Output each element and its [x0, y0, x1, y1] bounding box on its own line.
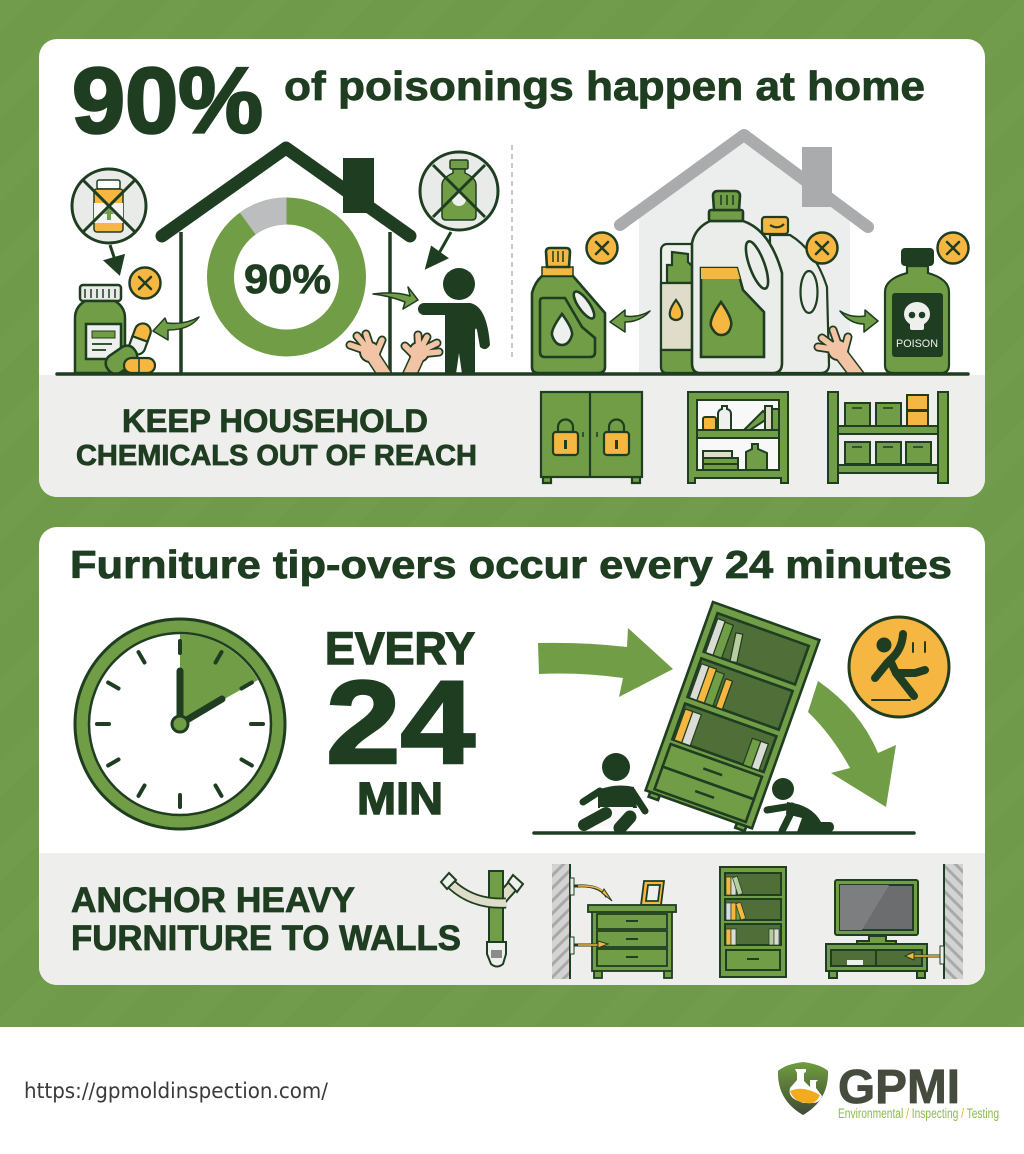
arrow: push	[538, 628, 673, 697]
arrow to medicine	[153, 317, 199, 340]
callout: keep chemicals out of reach: CHEMICALS OUT OF REACH	[76, 440, 477, 472]
icon: locked cabinet	[541, 392, 642, 483]
warning badges	[586, 232, 968, 264]
grey action strip	[39, 853, 985, 985]
warning badge	[130, 268, 160, 298]
logo shield	[778, 1062, 828, 1115]
poison bottle: POISON	[896, 338, 938, 350]
elapsed wedge	[180, 634, 258, 724]
grey action strip	[39, 375, 985, 497]
big stat 90%: 90%	[72, 48, 263, 152]
icon: medicine bottle and pills	[75, 285, 155, 377]
grey house	[620, 135, 868, 374]
stat: every 24 min: 24	[326, 657, 475, 789]
white jug with orange cap	[762, 217, 829, 373]
heading: Furniture tip-overs occur every 24 minutes	[70, 544, 952, 587]
icon: dresser anchored to wall	[552, 864, 676, 979]
reaching hands	[350, 334, 439, 378]
footer url: https://gpmoldinspection.com/	[24, 1079, 329, 1103]
icon: crossed chemical	[420, 152, 498, 230]
spray bottle	[661, 244, 701, 373]
capsule	[127, 321, 153, 357]
reaching hand	[818, 330, 860, 379]
stat: every 24 min	[325, 623, 475, 824]
stat: every 24 min: EVERY	[325, 623, 475, 674]
stat: every 24 min: MIN	[357, 773, 443, 824]
panel: poisonings	[39, 39, 985, 497]
icon: small bookcase	[720, 867, 786, 977]
crawling baby	[767, 778, 834, 832]
clock hands	[180, 671, 222, 724]
callout: keep chemicals out of reach	[76, 403, 477, 472]
arrow to poison bottle	[840, 310, 878, 332]
house roof	[162, 148, 410, 236]
green pill	[102, 342, 141, 377]
ground line	[534, 831, 914, 835]
icon: anchor strap	[441, 871, 523, 966]
small green jug	[532, 248, 605, 373]
donut chart	[220, 211, 352, 343]
icon: crossed medicine	[72, 169, 146, 243]
falling bookcase	[644, 602, 819, 833]
logo tagline: Environmental / Inspecting / Testing	[838, 1106, 999, 1121]
arrow down to child	[427, 232, 451, 267]
footer band	[0, 1027, 1024, 1154]
sitting baby	[583, 753, 645, 828]
callout: anchor furniture	[71, 881, 461, 958]
arrow down to medicine	[106, 245, 123, 273]
arrow to child	[373, 287, 418, 309]
logo: GPMI	[778, 1061, 999, 1121]
donut chart: 90%	[244, 256, 331, 302]
ground line	[57, 372, 968, 376]
large detergent jug	[692, 191, 782, 373]
poison bottle	[885, 248, 949, 373]
panel card	[39, 527, 985, 985]
arrow to small jug	[610, 310, 650, 332]
icon: storage rack	[828, 392, 948, 483]
panel card	[39, 39, 985, 497]
orange capsule	[124, 358, 155, 373]
skull	[904, 302, 930, 330]
callout: anchor furniture: FURNITURE TO WALLS	[71, 919, 461, 958]
child silhouette	[418, 268, 490, 374]
clock	[75, 619, 285, 829]
warning: falling person	[849, 617, 949, 717]
logo wordmark: GPMI	[838, 1061, 960, 1114]
arrow: falling	[808, 681, 896, 807]
callout: anchor furniture: ANCHOR HEAVY	[71, 881, 355, 920]
house chimney	[343, 158, 374, 213]
house with donut chart	[162, 148, 410, 375]
heading: of poisonings happen at home	[284, 63, 925, 109]
icon: open shelf with bottles	[688, 392, 788, 483]
callout: keep chemicals out of reach: KEEP HOUSEHOLD	[122, 403, 428, 439]
icon: TV anchored to wall	[826, 864, 963, 979]
house walls	[181, 232, 390, 375]
divider	[511, 145, 513, 360]
panel: furniture tip-overs	[39, 527, 985, 985]
